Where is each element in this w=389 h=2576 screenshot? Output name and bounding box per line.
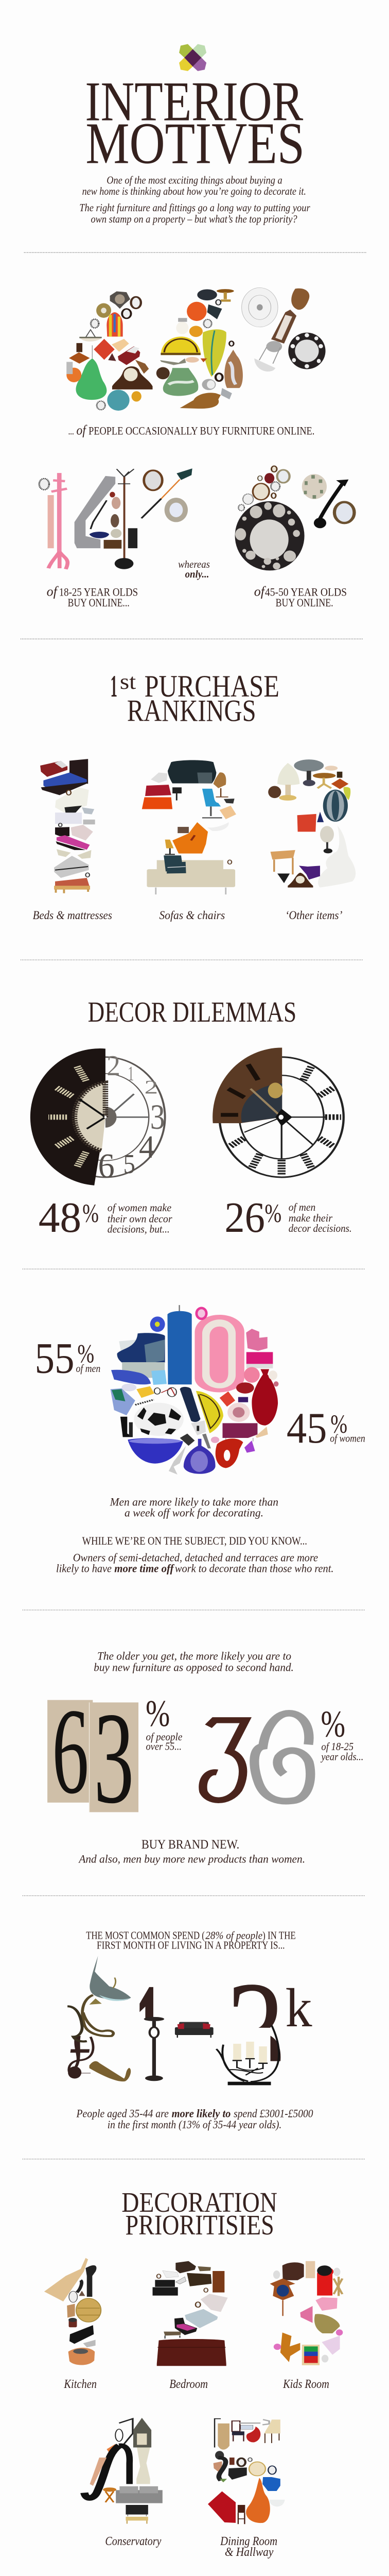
text: men take time off (110, 1496, 278, 1519)
text: whereas only (178, 559, 210, 580)
stat: 48 percent of women (39, 1194, 172, 1242)
captions: age groups buying online: of (47, 584, 59, 599)
caption: buy brand new: BUY BRAND NEW. (142, 1837, 239, 1852)
text: men take time off: a week off work for decorating. (125, 1506, 263, 1519)
heading: most common spend (86, 1930, 296, 1951)
figure: number 3 built from kids room items (270, 2261, 343, 2365)
logo: Wayfair mark (179, 44, 206, 71)
stat: 48 percent of women: % (82, 1198, 99, 1228)
figure: number 10 and circle built from products (111, 1305, 278, 1475)
labels: last two rooms: & Hallway (225, 2545, 274, 2559)
clock: half clock for women: 2 (145, 1076, 158, 1098)
caption: people buying furniture online: ... (68, 425, 74, 437)
captions: age groups buying online (47, 584, 347, 609)
stat: 55 percent of men: of men (76, 1362, 100, 1375)
labels: purchase categories: Sofas & chairs (160, 909, 225, 922)
clock: half clock for women: 6 (98, 1147, 115, 1185)
figure: number 2 built from bedroom items (153, 2261, 228, 2366)
title (85, 71, 305, 176)
heading: 1st purchase rankings: RANKINGS (127, 693, 256, 727)
text: older buyers: The older you get, the more likely you are to (97, 1650, 291, 1662)
text: older buyers: buy new furniture as opposed to second hand. (94, 1661, 294, 1673)
stat: 63 percent tiles: 3 (94, 1685, 134, 1831)
panel: intro (24, 44, 367, 252)
clock: half clock for women: 2 (107, 1049, 120, 1081)
stat: 36 percent house numbers: % (321, 1703, 345, 1745)
figure: pound 1 to 3k built from sculptures: 3 (226, 1951, 285, 2116)
captions: age groups buying online: 18-25 YEAR OLDS (59, 586, 138, 598)
figure: 68 percent built from lamps and mirrors (66, 287, 326, 411)
labels: purchase categories (33, 909, 342, 922)
figure: number 2 built from sofas and chairs (142, 760, 236, 894)
stat: 26 percent of men: % (264, 1198, 281, 1228)
figure: number 5 built from dining and hallway items (208, 2419, 285, 2524)
heading: 1st purchase rankings: PURCHASE (145, 669, 279, 703)
stat: 36 percent house numbers: year olds... (320, 1751, 363, 1763)
figure: pound 1 to 3k built from sculptures (67, 1956, 312, 2086)
clock: half clock for women: 5 (123, 1149, 135, 1179)
stat: 48 percent of women: of women make (108, 1202, 171, 1214)
stat: 45 percent of women: of women (330, 1432, 365, 1445)
stat: 55 percent of men: % (77, 1339, 94, 1368)
panel: first month spend (23, 1930, 365, 2159)
clock: half clock for women: 1 (128, 1061, 134, 1085)
stat: 48 percent of women: 48 (39, 1194, 81, 1242)
captions: age groups buying online: BUY ONLINE... (68, 596, 130, 609)
text: people aged 35-44: more likely to (172, 2107, 231, 2120)
caption: people buying furniture online: of (76, 423, 87, 438)
stat: 45 percent of women: 45 (287, 1403, 327, 1452)
stat: 45 percent of women: % (330, 1410, 347, 1439)
stat: 26 percent of men: decor decisions. (289, 1222, 352, 1234)
stat: 36 percent house numbers: of 18-25 (321, 1740, 353, 1753)
stat: 63 percent tiles (47, 1683, 182, 1831)
clock: half clock for men (213, 1047, 344, 1177)
intro text: One of the most exciting things about buying a (107, 174, 282, 187)
heading: most common spend: 28% of people (205, 1930, 262, 1941)
stat: 26 percent of men (224, 1194, 352, 1242)
panel: decoration priorities (23, 2187, 365, 2576)
text: older buyers (94, 1650, 294, 1673)
stat: 63 percent tiles: of people (146, 1731, 182, 1743)
labels: last two rooms: Dining Room (220, 2534, 277, 2548)
captions: age groups buying online: BUY ONLINE. (276, 596, 333, 609)
heading: 1st purchase rankings: 1 (111, 669, 117, 703)
figure: pound 1 to 3k built from sculptures: 1 (136, 1955, 161, 2118)
text: people aged 35-44: in the first month (13% of 35-44 year olds). (108, 2119, 281, 2131)
clock: half clock for women (30, 1048, 165, 1185)
heading: most common spend: ) IN THE (262, 1930, 296, 1941)
stat: 26 percent of men: 26 (224, 1194, 265, 1242)
heading: most common spend: THE MOST COMMON SPEND ( (86, 1930, 205, 1941)
stat: 48 percent of women: their own decor (108, 1213, 172, 1225)
heading: decoration prioritisies: DECORATION (121, 2187, 277, 2218)
text: people aged 35-44: People aged 35-44 are (76, 2107, 169, 2120)
labels: first three rooms: Bedroom (169, 2377, 208, 2391)
stat: 63 percent tiles: over 55... (146, 1740, 182, 1752)
figure: 14 percent built from coat racks and mirrors (39, 468, 192, 569)
heading: 1st purchase rankings (111, 669, 279, 727)
panel: buying online (21, 287, 363, 639)
labels: purchase categories: Beds & mattresses (33, 909, 112, 922)
text: whereas only: only... (185, 569, 209, 580)
stat: 26 percent of men: of men (289, 1201, 315, 1213)
figure: number 1 built from kitchen items (44, 2258, 101, 2365)
text: men take time off: Men are more likely to take more than (110, 1496, 278, 1508)
heading: 1st purchase rankings: st (120, 670, 136, 694)
intro text (79, 174, 310, 225)
stat: 55 percent of men: 55 (34, 1334, 75, 1382)
clock: half clock for women: 4 (139, 1129, 155, 1165)
text: people aged 35-44 (76, 2107, 313, 2131)
panel: buying brand new (23, 1650, 365, 1896)
labels: last two rooms: Conservatory (105, 2534, 162, 2548)
stat: 36 percent house numbers (203, 1703, 363, 1801)
caption: buy brand new (78, 1837, 305, 1865)
labels: first three rooms: Kitchen (64, 2377, 97, 2391)
labels: purchase categories: ‘Other items’ (285, 909, 342, 922)
figure: number 3 built from other items (268, 759, 356, 888)
labels: first three rooms (64, 2377, 329, 2391)
text: owners take more time off: likely to have (56, 1562, 112, 1574)
figure: number 1 built from beds (40, 759, 95, 893)
figure: number 4 built from conservatory items (84, 2418, 163, 2524)
panel: first purchase rankings (21, 669, 363, 960)
caption: people buying furniture online (68, 423, 314, 438)
labels: last two rooms (105, 2534, 277, 2559)
stat: 63 percent tiles: % (146, 1693, 170, 1734)
figure: pound 1 to 3k built from sculptures: k (285, 1977, 312, 2039)
clock: half clock for women: 3 (150, 1097, 165, 1137)
panel: decor dilemmas (23, 996, 365, 1269)
text: owners take more time off: more time off (114, 1562, 175, 1574)
labels: first three rooms: Kids Room (282, 2377, 329, 2391)
text: people aged 35-44: spend £3001-£5000 (234, 2107, 313, 2120)
stat: 26 percent of men: make their (289, 1212, 333, 1224)
heading: decoration prioritisies: PRIORITISIES (125, 2209, 274, 2241)
stat: 48 percent of women: decisions, but... (108, 1223, 170, 1235)
figure: pound 1 to 3k built from sculptures: £ (66, 2002, 101, 2099)
figure: 8 percent built from mirrors and clocks (235, 466, 354, 570)
heading: decoration prioritisies (121, 2187, 277, 2241)
text: owners take more time off (56, 1551, 333, 1574)
stat: 63 percent tiles: 6 (52, 1683, 89, 1819)
captions: age groups buying online: of (254, 584, 266, 599)
panel: time off work (23, 1305, 365, 1610)
text: whereas only: whereas (178, 559, 210, 570)
